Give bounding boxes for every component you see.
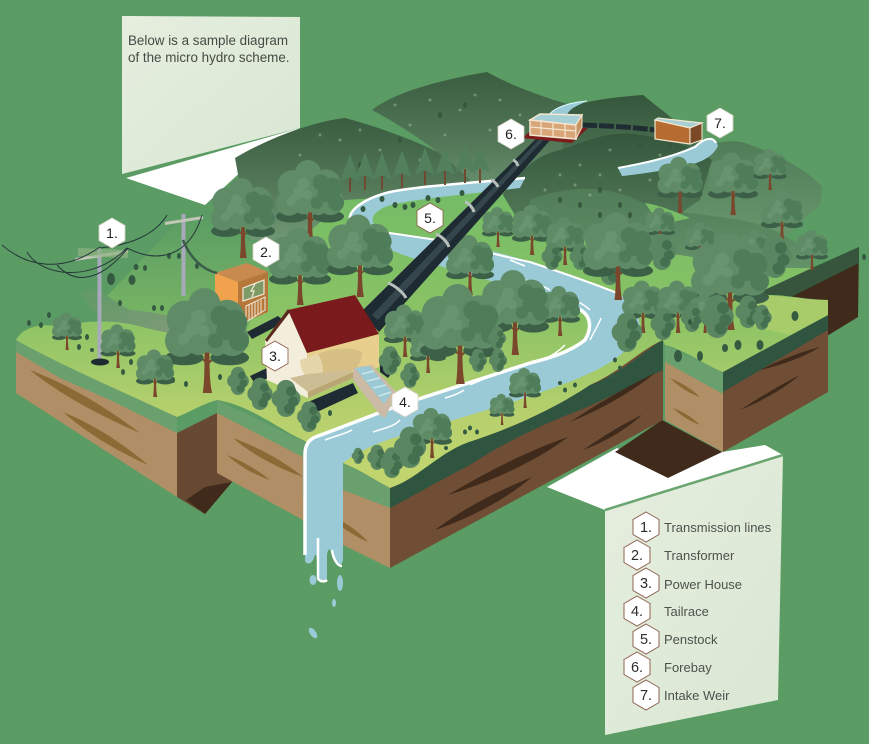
label numbers: 1. xyxy=(106,225,118,241)
label 4 xyxy=(392,387,418,417)
legend labels: Transmission lines xyxy=(664,520,772,535)
label 3 xyxy=(262,341,288,371)
upper stream xyxy=(547,101,587,124)
legend numbers: 1. xyxy=(640,520,652,536)
label numbers: 6. xyxy=(505,126,517,142)
label numbers xyxy=(106,115,726,410)
legend numbers: 6. xyxy=(631,660,643,676)
block: front soil right face xyxy=(390,338,663,568)
panel: legend xyxy=(605,455,783,735)
legend labels: Tailrace xyxy=(664,604,709,619)
trees: mid row xyxy=(269,212,772,352)
power house xyxy=(265,295,397,418)
legend numbers: 3. xyxy=(640,576,652,592)
legend labels: Intake Weir xyxy=(664,688,730,703)
intake weir tank xyxy=(655,118,702,144)
legend labels: Power House xyxy=(664,577,742,592)
legend numbers xyxy=(631,520,652,704)
block: centre soil xyxy=(217,400,305,520)
legend numbers: 7. xyxy=(640,688,652,704)
intro text: Below is a sample diagram xyxy=(128,33,288,48)
river white banks xyxy=(305,178,617,581)
dark under-block shadow (left notch) xyxy=(177,413,232,514)
legend edge xyxy=(605,455,783,510)
block: right soil xyxy=(665,313,828,452)
label numbers: 5. xyxy=(424,210,436,226)
hill speckles xyxy=(298,94,682,196)
penstock pipe xyxy=(361,130,552,332)
intake stream xyxy=(618,138,718,176)
rear hole under right block xyxy=(615,420,722,478)
label numbers: 7. xyxy=(714,115,726,131)
trees: front xyxy=(52,270,549,478)
label numbers: 3. xyxy=(269,348,281,364)
block: front soil left face xyxy=(303,463,390,568)
label 5 xyxy=(417,203,443,233)
legend numbers: 2. xyxy=(631,548,643,564)
right land strip xyxy=(745,296,828,335)
small grass patch between hills xyxy=(645,203,690,225)
legend labels: Penstock xyxy=(664,632,718,647)
roads around house xyxy=(247,316,393,412)
hills xyxy=(235,72,822,300)
back wall of right block xyxy=(747,247,859,336)
house tailrace steps xyxy=(353,365,397,418)
forebay xyxy=(522,114,588,143)
panel: intro note xyxy=(122,16,300,205)
label 1 xyxy=(99,218,125,248)
label 6 xyxy=(498,119,524,149)
fading rear ground behind poles xyxy=(80,215,285,372)
drops xyxy=(307,575,343,640)
label numbers: 4. xyxy=(399,394,411,410)
trees: rear row xyxy=(211,149,828,285)
label 7 xyxy=(707,108,733,138)
legend labels: Transformer xyxy=(664,548,735,563)
legend numbers: 5. xyxy=(640,632,652,648)
land surface xyxy=(16,190,828,488)
legend numbers: 4. xyxy=(631,604,643,620)
legend hexagons xyxy=(624,512,659,710)
intro text: of the micro hydro scheme. xyxy=(128,50,290,65)
trees: far conifers xyxy=(340,145,490,192)
legend labels xyxy=(664,520,772,703)
block: left soil xyxy=(16,340,177,497)
scattered dots: vegetation xyxy=(27,190,866,450)
intake pipe xyxy=(582,125,655,130)
panel: legend shadow xyxy=(547,445,783,510)
label numbers: 2. xyxy=(260,244,272,260)
label 2 xyxy=(253,237,279,267)
legend labels: Forebay xyxy=(664,660,712,675)
river xyxy=(305,178,640,640)
labels on diagram xyxy=(99,108,733,417)
transformer xyxy=(215,263,268,325)
transmission lines xyxy=(2,214,217,366)
dark notch base xyxy=(186,482,232,514)
